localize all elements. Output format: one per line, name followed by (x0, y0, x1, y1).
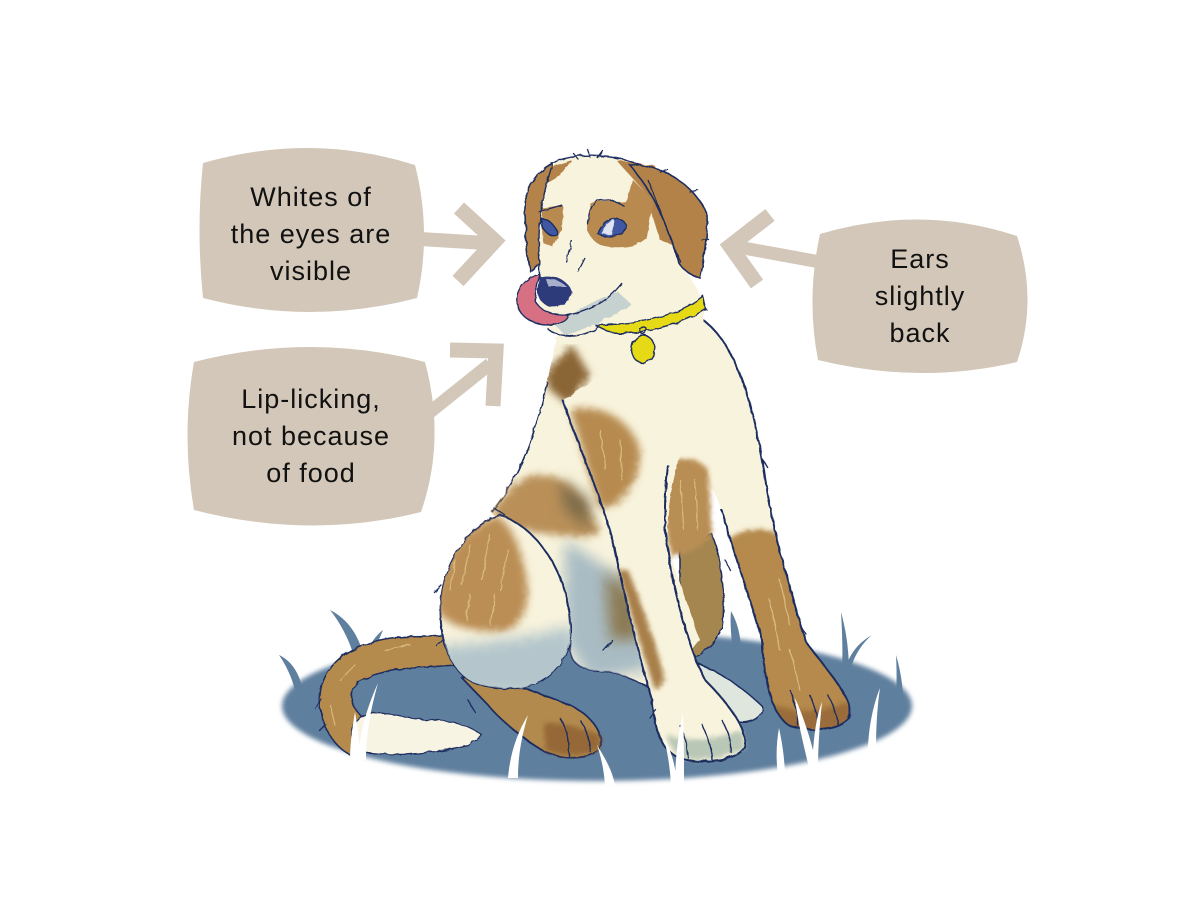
right foreleg (690, 316, 870, 740)
leg outline (563, 400, 745, 761)
right eye highlight (601, 219, 614, 235)
right eye patch (587, 180, 653, 247)
speech panel: eyes (200, 148, 424, 312)
nose (537, 276, 572, 306)
paw shade (545, 722, 600, 755)
foreground grass blades (350, 683, 880, 785)
face base (538, 156, 704, 336)
tail brown part (320, 634, 455, 756)
leg to paw (462, 677, 601, 758)
callout: ears back (730, 215, 1028, 373)
arrow: points to the ears (730, 215, 820, 284)
callout: whites of the eyes (200, 148, 495, 312)
fur tuft strokes (315, 149, 806, 731)
collar tag (632, 326, 654, 363)
ground shadow ellipse (282, 631, 912, 781)
face outline (539, 156, 640, 336)
paw shade (665, 730, 745, 760)
toe lines (790, 690, 838, 730)
eyebrow and muzzle lines (538, 180, 680, 272)
haunch base (441, 515, 571, 689)
leg outline (700, 318, 850, 730)
speech panel: lips (188, 347, 435, 526)
far rear paw (690, 660, 762, 722)
background grass blades (279, 610, 903, 715)
muzzle shade (552, 292, 632, 336)
tail white tip (352, 713, 482, 754)
leg brown lower (729, 525, 848, 730)
torso base (490, 320, 716, 690)
label: lip-licking: of food (266, 458, 356, 488)
haunch brown patch (436, 516, 575, 695)
leg base (563, 360, 745, 761)
rear leg, far side (680, 534, 724, 658)
toe lines (560, 718, 590, 757)
haunch (436, 515, 575, 695)
torso outline (492, 382, 655, 692)
shoulder patches and belly shade (492, 345, 650, 680)
arrow: points to the mouth (430, 350, 496, 412)
label: ears slightly back: back (889, 318, 951, 348)
left eye (541, 218, 558, 236)
speech panel: ears (812, 219, 1028, 373)
toe lines (680, 720, 731, 760)
illustration: sitting dog on grass (279, 149, 912, 785)
leg base (690, 316, 850, 730)
label: whites of the eyes: visible (270, 256, 352, 286)
left ear (525, 163, 562, 272)
torso (490, 320, 716, 692)
left eye patch (542, 205, 563, 247)
light fur texture (330, 430, 800, 725)
label: ears slightly back (875, 244, 965, 348)
label: lip-licking (232, 384, 390, 488)
nose highlight (546, 279, 566, 286)
head (517, 156, 707, 363)
label: whites of the eyes (231, 182, 391, 286)
paw shading (776, 702, 848, 730)
right eye (598, 219, 627, 236)
label: whites of the eyes: the eyes are (231, 219, 391, 249)
mouth line (568, 283, 622, 315)
front foreleg (563, 360, 745, 761)
tongue (517, 274, 568, 325)
label: whites of the eyes: Whites of (250, 182, 372, 212)
dog figure (315, 149, 870, 761)
label: ears slightly back: slightly (875, 281, 965, 311)
chest brown patch behind leg (663, 459, 712, 556)
near rear foot (462, 677, 601, 758)
label: ears slightly back: Ears (890, 244, 950, 274)
right ear (630, 165, 707, 278)
neck fill (556, 300, 704, 345)
label: lip-licking: not because (232, 421, 390, 451)
arrow: points to the eyes (420, 208, 495, 281)
forehead patch (616, 160, 685, 250)
label: lip-licking: Lip-licking, (241, 384, 381, 414)
collar (595, 296, 706, 333)
shoulder brown patch (570, 408, 640, 508)
callout: lip-licking (188, 347, 496, 526)
tail (320, 634, 482, 756)
inner leg shade (618, 570, 665, 690)
far hind shadow (612, 640, 695, 694)
top-left patch (541, 160, 572, 186)
